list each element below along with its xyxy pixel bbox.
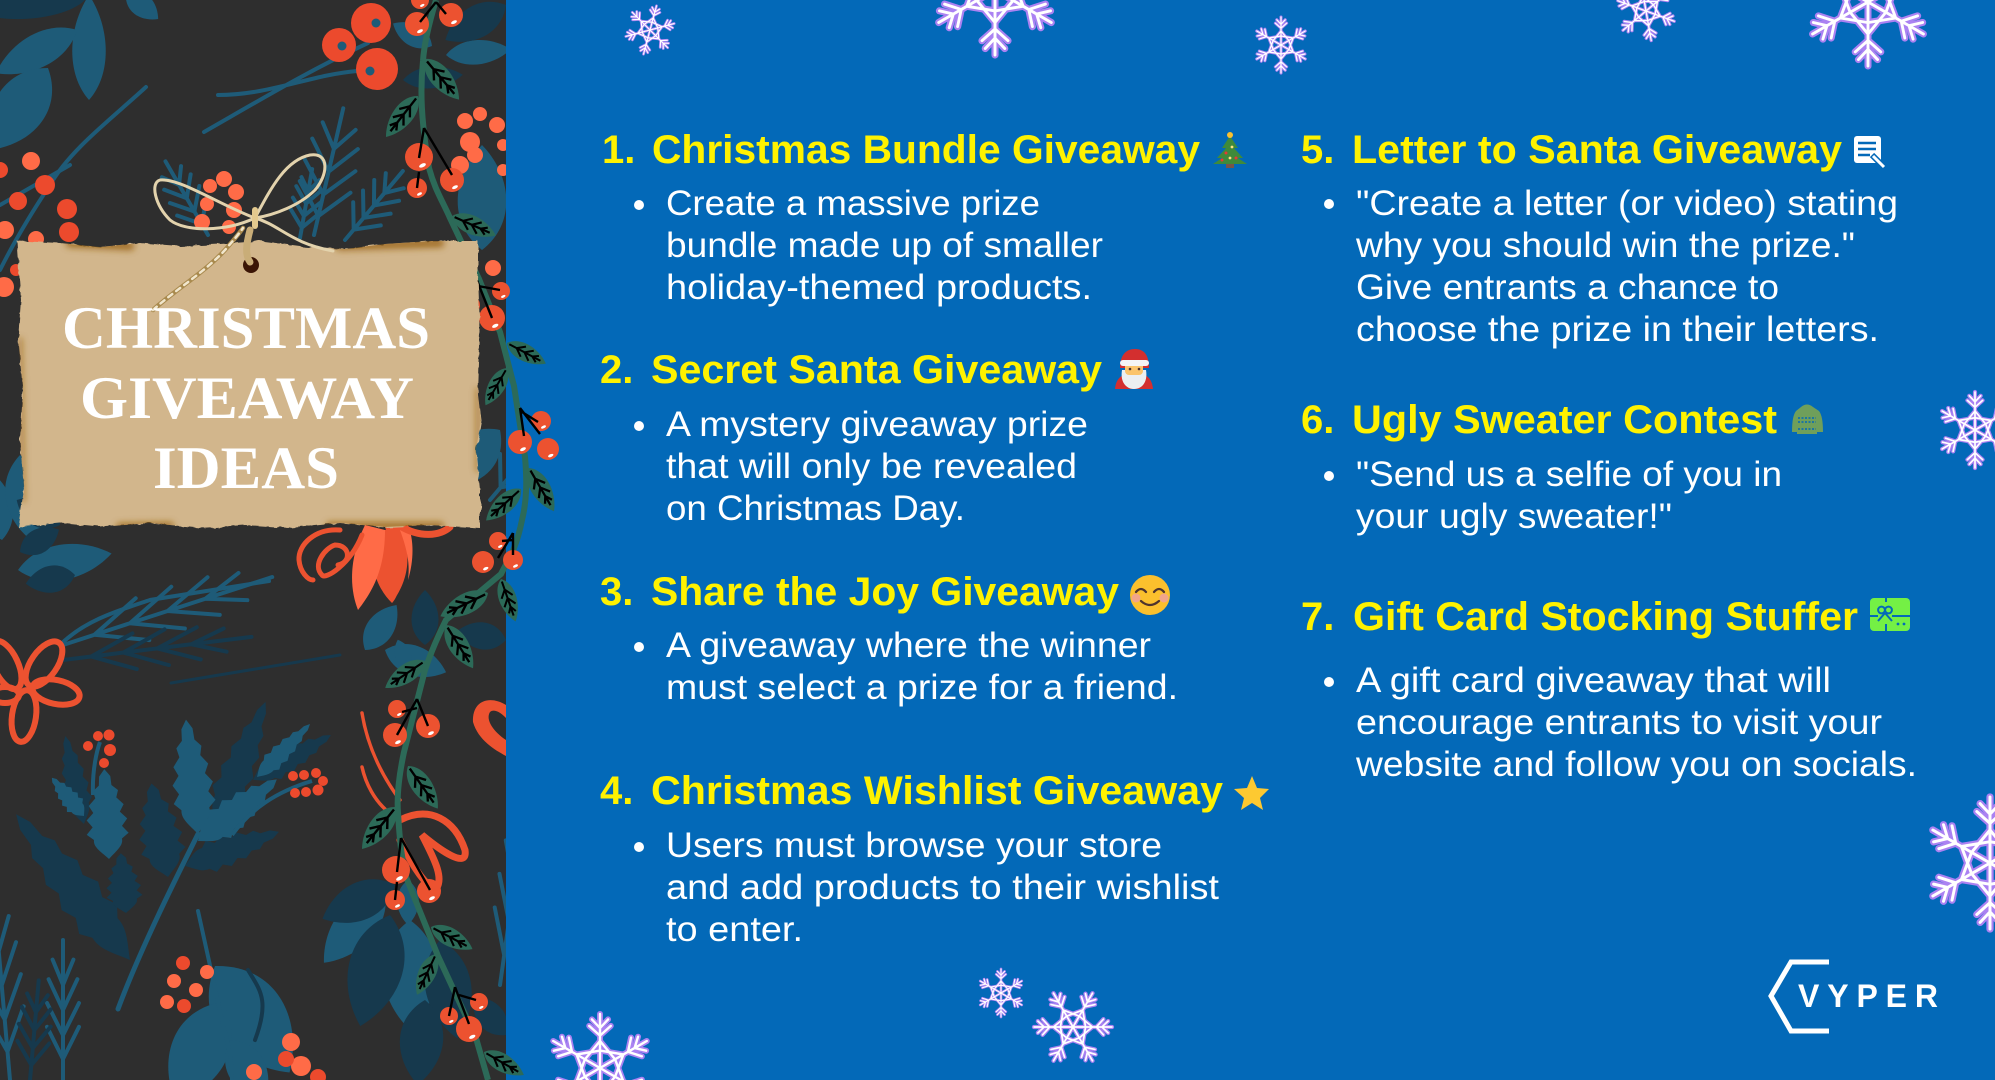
bullet text 7: encourage entrants to visit your	[1356, 703, 1882, 742]
frond cluster center	[0, 695, 338, 1009]
heading 5: Letter to Santa Giveaway	[1352, 128, 1843, 172]
heading 7: 7.	[1301, 595, 1334, 639]
bullet text 1: Create a massive prize	[666, 184, 1040, 223]
coral berries and ribbons in background	[0, 107, 509, 1080]
red flower outlines	[0, 635, 465, 890]
bullet text 3: A giveaway where the winner	[666, 626, 1151, 665]
bullet text 4: and add products to their wishlist	[666, 868, 1219, 907]
icon: star	[1234, 776, 1269, 810]
icon: letter document	[1854, 136, 1884, 167]
bullet text 1: bundle made up of smaller	[666, 226, 1103, 265]
heading 3: 3.	[600, 570, 633, 614]
icon: sweater	[1792, 404, 1823, 434]
twine bow	[153, 155, 333, 310]
vine with leaves and berries	[354, 0, 562, 1080]
bullet text 5: "Create a letter (or video) stating	[1356, 184, 1898, 223]
bullet text 4: to enter.	[666, 910, 803, 949]
bullet text 6	[1324, 455, 1782, 536]
bullet text 2: on Christmas Day.	[666, 489, 965, 528]
bullet text 4	[634, 826, 1219, 949]
bullet text 3	[634, 626, 1178, 707]
bullet text 6: your ugly sweater!"	[1356, 497, 1672, 536]
heading 3: Share the Joy Giveaway	[651, 570, 1120, 614]
stems and pine sprigs	[0, 43, 368, 1080]
item 3: Share the Joy Giveaway	[600, 570, 1178, 707]
heading 1: 1.	[602, 128, 635, 172]
bullet text 5: Give entrants a chance to	[1356, 268, 1779, 307]
panel: paper tag with bow	[17, 155, 481, 528]
item 2: Secret Santa Giveaway	[600, 348, 1153, 528]
heading 4: Christmas Wishlist Giveaway	[651, 769, 1224, 813]
title: GIVEAWAY	[80, 365, 414, 431]
bullet text 3: must select a prize for a friend.	[666, 668, 1178, 707]
item 4: Christmas Wishlist Giveaway	[600, 769, 1269, 949]
bullet text 2: A mystery giveaway prize	[666, 405, 1088, 444]
heading 6: Ugly Sweater Contest	[1352, 398, 1777, 442]
string hole	[243, 257, 259, 273]
item 1: Christmas Bundle Giveaway	[602, 128, 1247, 307]
bullet text 7	[1324, 661, 1917, 784]
heading 7: Gift Card Stocking Stuffer	[1353, 595, 1858, 639]
heading 4: 4.	[600, 769, 633, 813]
logo: VYPER	[1771, 962, 1938, 1031]
bullet text 6: "Send us a selfie of you in	[1356, 455, 1782, 494]
heading 1: Christmas Bundle Giveaway	[652, 128, 1201, 172]
red poinsettia under tag	[299, 525, 450, 610]
panel: decorative botanical side panel	[0, 0, 506, 1080]
icon: santa	[1115, 349, 1153, 389]
bullet text 7: website and follow you on socials.	[1355, 745, 1917, 784]
bullet text 2	[634, 405, 1088, 528]
bullet text 7: A gift card giveaway that will	[1356, 661, 1831, 700]
bullet text 1	[634, 184, 1103, 307]
title	[62, 295, 430, 501]
logo: VYPER: VYPER	[1798, 978, 1938, 1014]
bullet text 5: why you should win the prize."	[1355, 226, 1855, 265]
item 6: Ugly Sweater Contest	[1301, 398, 1823, 536]
torn kraft paper tag	[17, 241, 481, 528]
heading 2: Secret Santa Giveaway	[651, 348, 1103, 392]
heading 5: 5.	[1301, 128, 1334, 172]
bullet text 5	[1324, 184, 1898, 349]
title: CHRISTMAS	[62, 295, 430, 361]
heading 2: 2.	[600, 348, 633, 392]
item 5: Letter to Santa Giveaway	[1301, 128, 1898, 349]
item 7: Gift Card Stocking Stuffer	[1301, 595, 1917, 784]
background foliage	[0, 0, 578, 1080]
icon: smiley	[1130, 575, 1170, 615]
icon: gift card	[1870, 598, 1910, 631]
bullet text 5: choose the prize in their letters.	[1356, 310, 1879, 349]
title: IDEAS	[153, 435, 339, 501]
bullet text 4: Users must browse your store	[666, 826, 1162, 865]
heading 6: 6.	[1301, 398, 1334, 442]
bullet text 2: that will only be revealed	[666, 447, 1077, 486]
snowflakes	[546, 0, 1995, 1080]
icon: christmas tree	[1213, 132, 1247, 168]
bullet text 1: holiday-themed products.	[666, 268, 1092, 307]
